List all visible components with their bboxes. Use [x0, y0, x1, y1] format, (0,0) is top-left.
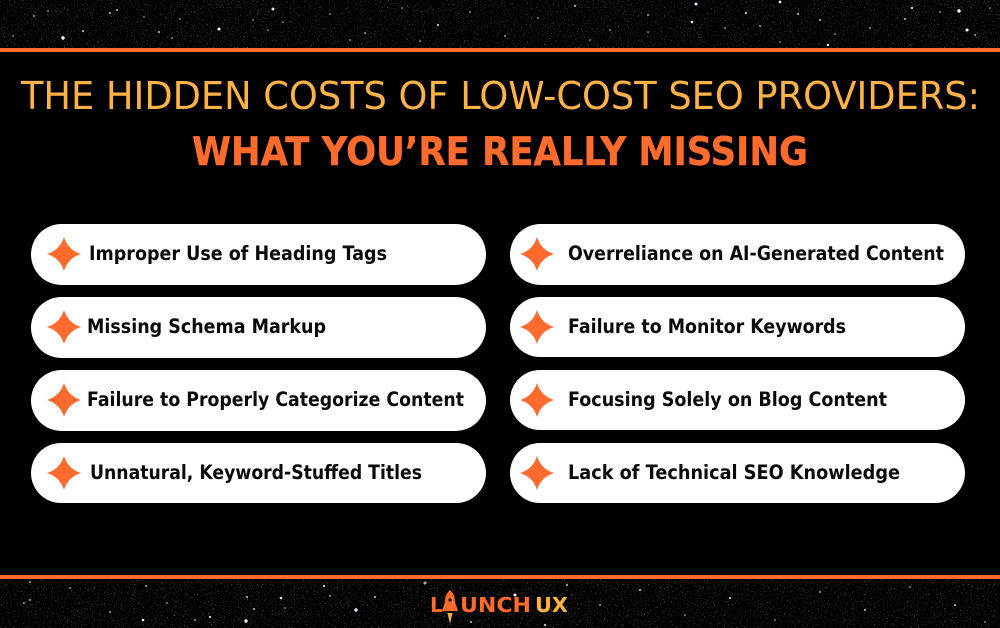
list item: Lack of Technical SEO Knowledge: [510, 443, 965, 503]
list item: Missing Schema Markup: Missing Schema Markup: [87, 315, 326, 338]
list item: Failure to Properly Categorize Content: Failure to Properly Categorize Content: [87, 388, 464, 411]
list item: Improper Use of Heading Tags: [31, 224, 486, 285]
logo: LaunchUX: [430, 590, 569, 624]
list item: Overreliance on AI-Generated Content: [510, 224, 965, 285]
title: [20, 74, 980, 175]
title line 2: WHAT YOU’RE REALLY MISSING: [192, 130, 808, 175]
list item: Failure to Properly Categorize Content: [31, 370, 486, 431]
list item: Failure to Monitor Keywords: Failure to Monitor Keywords: [568, 315, 846, 338]
list item: Lack of Technical SEO Knowledge: Lack of Technical SEO Knowledge: [568, 461, 900, 484]
icon: rocket: [442, 590, 458, 624]
list item: Unnatural, Keyword-Stuffed Titles: Unnatural, Keyword-Stuffed Titles: [90, 461, 422, 484]
top orange rule: [0, 48, 1000, 52]
starfield top band: [0, 0, 1000, 48]
list item: Missing Schema Markup: [31, 297, 486, 358]
list item: Overreliance on AI-Generated Content: Overreliance on AI-Generated Content: [568, 242, 944, 265]
list item: Focusing Solely on Blog Content: Focusing Solely on Blog Content: [568, 388, 887, 411]
starfield bottom band: [0, 579, 1000, 628]
list item: Improper Use of Heading Tags: Improper Use of Heading Tags: [89, 242, 387, 265]
logo UX: UX: [535, 593, 569, 617]
list item: Failure to Monitor Keywords: [510, 297, 965, 357]
title line 1: THE HIDDEN COSTS OF LOW-COST SEO PROVIDERS:: [20, 74, 980, 119]
list item: Focusing Solely on Blog Content: [510, 370, 965, 430]
logo wordmark: UNCH: [460, 593, 531, 617]
logo letter L: L: [430, 593, 443, 617]
list item: Unnatural, Keyword-Stuffed Titles: [31, 443, 486, 503]
bottom orange rule: [0, 575, 1000, 579]
